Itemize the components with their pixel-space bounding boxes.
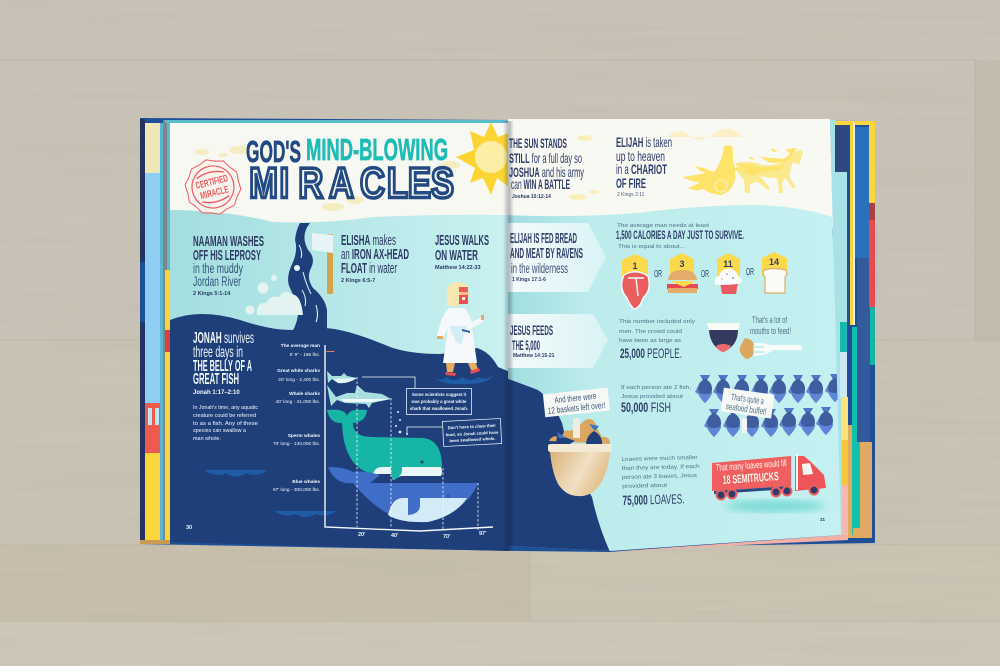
left page teal field — [170, 210, 510, 380]
icon: sperm whale — [327, 410, 442, 480]
size chart labels: 5' 9" - 196 lbs. — [290, 352, 320, 358]
text: 75,000 loaves: than they are today. If each — [622, 464, 700, 472]
banner: Elijah fed: 1 Kings 17:1-6 — [512, 277, 546, 283]
icon: burger — [667, 253, 698, 293]
banner: Elijah fed: ELIJAH IS FED BREAD — [510, 231, 577, 247]
icon: shark — [327, 371, 357, 383]
text: Jonah: GREAT FISH — [193, 371, 239, 388]
text: 50,000 fish: Jesus provided about — [621, 394, 683, 400]
banner: Jesus feeds: THE 5,000 — [512, 337, 540, 353]
text: lots of mouths: That's a lot of — [752, 315, 787, 325]
icon: semitruck: 18 SEMITRUCKS — [722, 469, 779, 487]
icon: bread: 14 — [769, 257, 779, 267]
text: Jonah: man whole. — [193, 436, 221, 442]
axis labels: 40' — [391, 533, 399, 539]
banner: Elijah fed: AND MEAT BY RAVENS — [510, 246, 583, 262]
callout: great white: shark that swallowed Jonah. — [410, 406, 468, 411]
wave marks — [204, 470, 267, 476]
banner: Elijah fed — [506, 223, 606, 292]
text: lots of mouths — [750, 315, 791, 336]
icon: basket with loaves and fish — [548, 419, 612, 496]
text: OR: OR — [654, 269, 662, 280]
icon: Jesus on water — [432, 282, 493, 384]
axis labels — [358, 531, 486, 538]
left page edges — [140, 119, 510, 544]
text: Elisha — [341, 233, 409, 284]
text: Jonah: JONAH survives — [193, 330, 254, 347]
text: Jonah: three days in — [193, 344, 243, 361]
right page white header — [506, 118, 846, 228]
chart axes and dashes — [325, 345, 493, 531]
callout: great white — [406, 388, 472, 414]
size chart labels: Sperm whales — [288, 433, 320, 439]
size chart labels: Great white sharks — [277, 368, 320, 374]
text: Jonah: species can swallow a — [193, 428, 246, 434]
text: Elisha: FLOAT in water — [341, 261, 397, 277]
text: calories: This is equal to about... — [618, 244, 686, 250]
callout: great white: Some scientists suggest it — [412, 392, 467, 397]
icon: ax — [312, 233, 333, 294]
right page edges — [610, 120, 875, 552]
icon: cupcake — [715, 253, 742, 294]
callout: swallowed whole — [442, 418, 502, 446]
text: Naaman: in the muddy — [193, 260, 243, 276]
sign: seafood buffet: seafood buffet! — [725, 401, 767, 417]
text: Jonah: Jonah 1:17–2:10 — [193, 390, 240, 396]
text: 50,000 fish: If each person ate 2 fish, — [621, 385, 691, 391]
text: sun stands still: can WIN A BATTLE — [511, 176, 570, 192]
text: Naaman: OFF HIS LEPROSY — [193, 248, 261, 264]
icon: chariot of fire — [682, 145, 803, 195]
size chart labels: Blue whales — [292, 479, 320, 485]
text: Elijah chariot: in a CHARIOT — [616, 161, 667, 177]
text: Jesus walks on water: JESUS WALKS — [435, 233, 489, 249]
text: 25,000 people: 25,000 PEOPLE. — [620, 346, 682, 361]
left page — [168, 120, 518, 555]
icon: average man — [326, 351, 335, 352]
text: 75,000 loaves — [621, 455, 701, 508]
size chart labels: The average man — [281, 343, 320, 349]
text: calories: The average man needs at least — [617, 223, 710, 229]
axis labels: 20' — [358, 532, 366, 538]
axis labels: 70' — [443, 534, 451, 540]
stamp: certified miracle — [184, 159, 242, 215]
banner: Jesus feeds: Matthew 14:15-21 — [513, 353, 555, 359]
spine gutter shadow — [503, 121, 514, 551]
text: Jonah — [193, 330, 259, 442]
stamp: certified miracle: MIRACLE — [199, 184, 230, 202]
text: Jonah: In Jonah's time, any aquatic — [193, 405, 259, 411]
text: Elijah chariot: 2 Kings 2:11 — [617, 192, 645, 198]
icon: semitruck: That many loaves would fill — [715, 458, 787, 474]
icon: foam bubbles — [246, 265, 303, 315]
right page teal field — [506, 205, 846, 552]
size chart labels: 97' long - 300,000 lbs. — [273, 487, 320, 493]
title: MIRACLES — [249, 160, 454, 207]
size chart labels: 70' long - 130,000 lbs. — [273, 441, 320, 447]
icon: steak — [622, 254, 649, 309]
text: 75,000 loaves: provided about — [622, 483, 668, 490]
left page deep water — [170, 314, 510, 555]
icon: semitruck — [712, 454, 826, 512]
icon: cupcake: 11 — [723, 259, 733, 269]
callout: great white: was probably a great white — [411, 399, 467, 404]
clouds — [195, 146, 460, 211]
text: 75,000 loaves: 75,000 LOAVES. — [622, 491, 685, 508]
text: sun stands still: STILL for a full day so — [509, 150, 582, 166]
text: Naaman — [193, 234, 264, 297]
sign: seafood buffet: That's quite a — [731, 392, 765, 406]
text: Jesus walks on water: Matthew 14:22-33 — [435, 265, 481, 271]
text: 25,000 people — [619, 319, 695, 361]
text: 25,000 people: men. The crowd could — [619, 329, 682, 335]
text: Jonah: THE BELLY OF A — [193, 358, 252, 375]
icon: blue whale — [328, 467, 478, 522]
callout: swallowed whole: food, so Jonah could have — [446, 430, 499, 437]
page number 31: 31 — [820, 517, 826, 522]
text: Elijah chariot: up to heaven — [616, 148, 665, 164]
text: Elisha: 2 Kings 6:5-7 — [341, 278, 375, 284]
right page deep water — [506, 378, 610, 552]
text: Naaman: Jordan River — [193, 273, 241, 289]
text: 25,000 people: have been as large as — [619, 338, 681, 344]
icon: Jordan river — [288, 223, 327, 332]
page number 30: 30 — [186, 525, 192, 531]
banner: Elijah fed: in the wilderness — [511, 260, 568, 276]
text: Naaman: NAAMAN WASHES — [193, 234, 264, 250]
axis labels: 97' — [479, 531, 487, 537]
text: Elisha: ELISHA makes — [341, 233, 396, 249]
banner: Jesus feeds: JESUS FEEDS — [510, 322, 553, 338]
icon: burger: 3 — [679, 259, 685, 269]
text: Elisha: an IRON AX-HEAD — [341, 247, 409, 263]
text: sun stands still: Joshua 10:12-14 — [512, 194, 551, 200]
sign: 12 baskets — [543, 388, 610, 438]
text: 25,000 people: This number included only — [619, 319, 695, 325]
icon: sun — [456, 123, 508, 195]
text: Jesus walks on water — [435, 235, 489, 269]
icon: whale shark — [327, 385, 391, 408]
text: Naaman: 2 Kings 5:1-14 — [193, 291, 231, 297]
text: OR: OR — [746, 267, 754, 278]
text: Jesus walks on water: ON WATER — [435, 248, 478, 264]
icon: mouth and fork — [707, 323, 802, 359]
callout: swallowed whole: been swallowed whole. — [449, 436, 496, 443]
text: Elijah chariot: OF FIRE — [616, 175, 646, 191]
text: 75,000 loaves: person ate 3 loaves, Jesus — [622, 473, 697, 481]
text: lots of mouths: mouths to feed! — [750, 326, 791, 336]
size chart labels: Whale sharks — [289, 391, 320, 397]
text: sun stands still: JOSHUA and his army — [509, 164, 584, 180]
size chart labels: 40' long - 41,000 lbs. — [276, 399, 320, 405]
size chart labels — [273, 343, 320, 493]
icon: rows of fish — [695, 374, 842, 437]
text: 50,000 fish: 50,000 FISH — [621, 400, 671, 415]
text: OR: OR — [701, 269, 709, 280]
right page — [506, 118, 846, 552]
sign: 12 baskets: And there were — [554, 391, 597, 405]
size chart labels: 20' long - 2,400 lbs. — [278, 377, 320, 383]
text: Elijah chariot: ELIJAH is taken — [616, 134, 672, 150]
text: Jonah: to as a fish. Any of these — [193, 421, 258, 427]
sign: seafood buffet — [721, 388, 774, 433]
text: 75,000 loaves: Loaves were much smaller — [621, 455, 698, 463]
title: MIND-BLOWING — [306, 132, 448, 167]
text: Jonah: creature could be referred — [193, 413, 256, 419]
left page white header — [170, 123, 508, 222]
icon: bread — [762, 252, 787, 293]
clouds — [569, 128, 743, 200]
icon: steak: 1 — [632, 261, 638, 271]
title: GOD'S — [246, 134, 301, 169]
banner: Jesus feeds — [506, 314, 608, 368]
text: 50,000 fish — [621, 385, 691, 415]
text: calories — [616, 223, 744, 250]
title — [246, 138, 454, 200]
stamp: certified miracle: CERTIFIED — [195, 173, 229, 192]
text: calories: 1,500 CALORIES A DAY JUST TO SURVIVE. — [616, 230, 744, 242]
callout: swallowed whole: Don't have to chew their — [447, 423, 496, 430]
text: Elijah chariot — [616, 134, 672, 198]
text: sun stands still — [509, 135, 584, 200]
text: sun stands still: THE SUN STANDS — [509, 135, 567, 151]
sign: 12 baskets: 12 baskets left over! — [547, 400, 606, 416]
book cover — [140, 118, 875, 552]
